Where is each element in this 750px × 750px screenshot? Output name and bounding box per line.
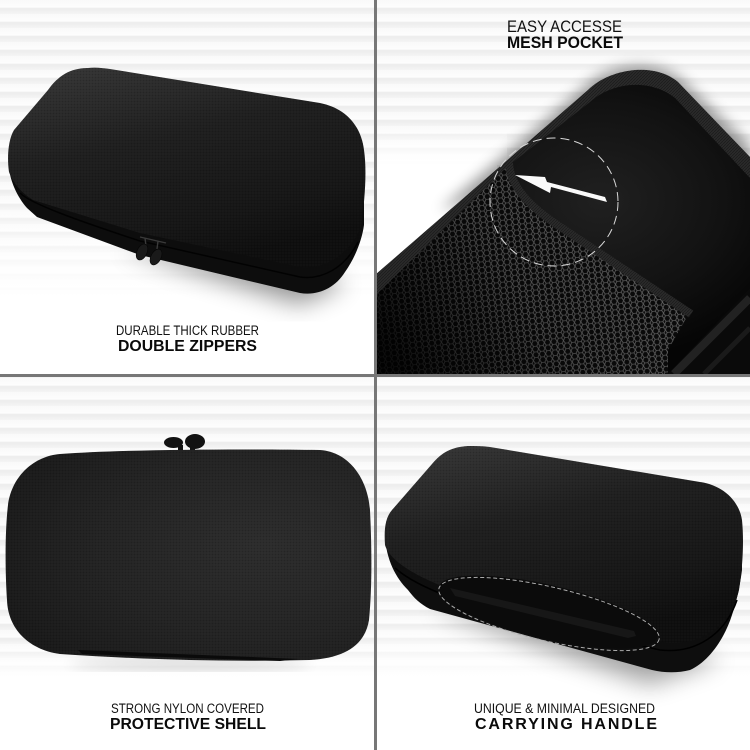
callout: dashed ellipse bbox=[438, 576, 660, 652]
caption: double zippers: DOUBLE ZIPPERS bbox=[118, 338, 257, 355]
zipper edge bbox=[671, 295, 750, 374]
case: front shell bbox=[6, 449, 371, 661]
caption: protective shell: PROTECTIVE SHELL bbox=[110, 716, 266, 733]
caption: double zippers: DURABLE THICK RUBBER bbox=[116, 323, 259, 338]
panel: double zippers bbox=[0, 0, 374, 374]
arrow bbox=[515, 175, 607, 202]
caption: mesh pocket bbox=[508, 20, 623, 48]
case: closed angled view with zippers bbox=[8, 68, 365, 294]
handle bbox=[440, 576, 656, 646]
caption: carrying handle bbox=[474, 704, 656, 729]
panel: carrying handle bbox=[377, 377, 750, 750]
panel: protective shell bbox=[0, 377, 374, 750]
caption: protective shell bbox=[111, 704, 266, 729]
callout: dashed circle bbox=[490, 138, 618, 266]
case: angled view with handle bbox=[385, 446, 743, 672]
caption: double zippers bbox=[116, 326, 258, 351]
caption: mesh pocket: MESH POCKET bbox=[507, 34, 623, 52]
caption: protective shell: STRONG NYLON COVERED bbox=[111, 701, 264, 716]
icon: zipper pulls bbox=[134, 237, 166, 267]
panel: mesh pocket bbox=[375, 0, 750, 374]
caption: mesh pocket: EASY ACCESSE bbox=[507, 17, 622, 36]
icon: zipper pulls bbox=[164, 434, 205, 451]
caption: carrying handle: CARRYING HANDLE bbox=[475, 716, 657, 733]
mesh pocket bbox=[375, 163, 691, 374]
caption: carrying handle: UNIQUE & MINIMAL DESIGNED bbox=[474, 701, 655, 716]
case interior bbox=[375, 70, 750, 374]
